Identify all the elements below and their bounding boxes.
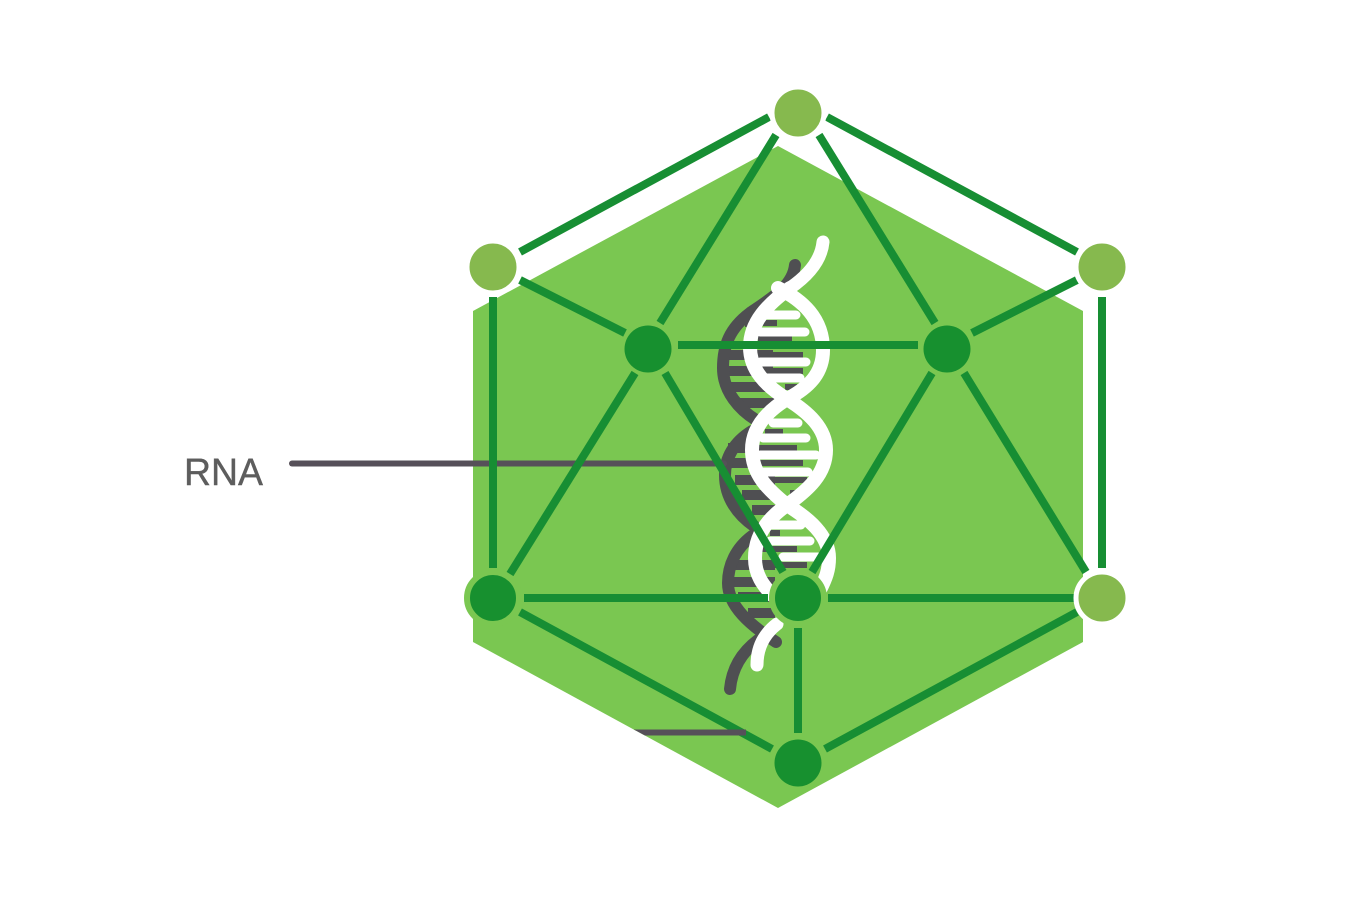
node: center vertex	[772, 572, 824, 624]
node: upper left vertex	[467, 241, 519, 293]
node: lower left vertex	[467, 572, 519, 624]
node: top vertex	[772, 87, 824, 139]
icon: dark RNA helix strand	[723, 265, 807, 689]
label leader: lower stub line	[634, 730, 746, 736]
label: RNA: RNA	[184, 452, 264, 494]
infographic: virus capsid diagram	[186, 90, 1126, 808]
panel: capsid hexagon body	[473, 146, 1083, 808]
node: lower right vertex	[1076, 572, 1128, 624]
icon: white RNA helix strand	[750, 242, 829, 665]
node: bottom vertex	[774, 740, 822, 786]
capsid lattice edges	[493, 117, 1102, 749]
node: inner right	[924, 326, 970, 372]
label leader: RNA pointer line	[292, 460, 724, 466]
node: upper right vertex	[1076, 241, 1128, 293]
node: inner left	[624, 326, 672, 372]
capsid vertex nodes	[467, 87, 1128, 786]
